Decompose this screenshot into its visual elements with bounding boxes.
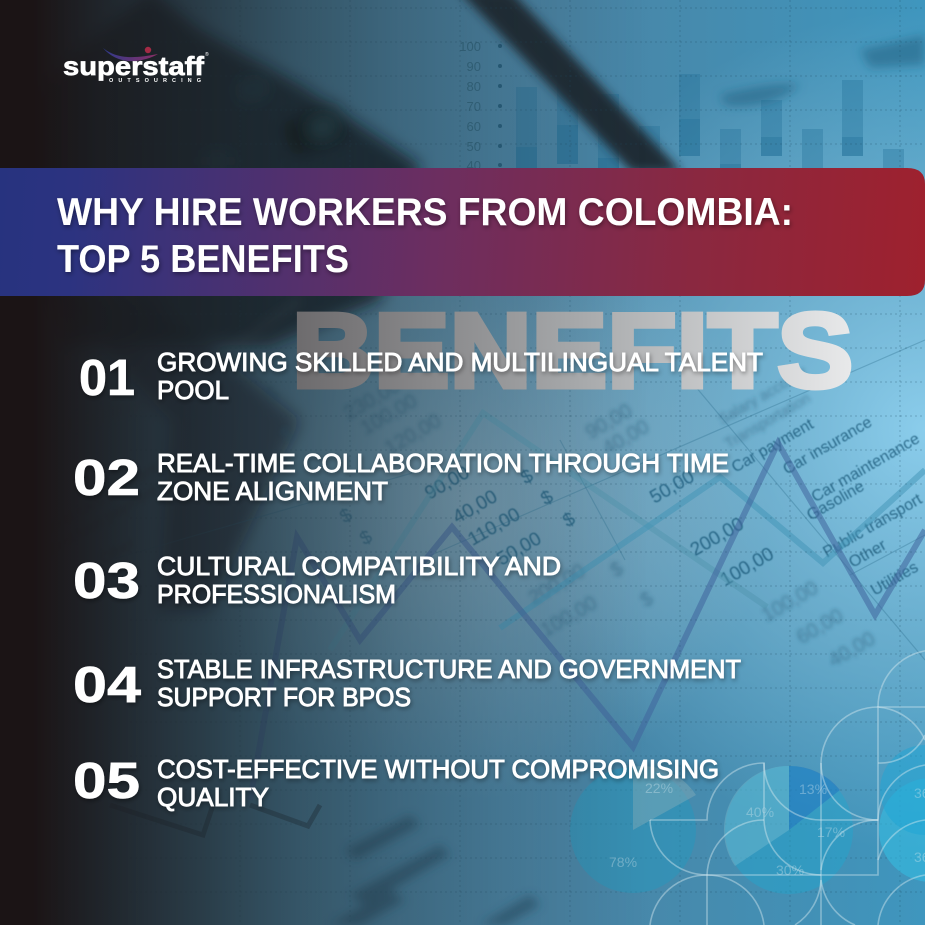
photo background: finance charts and table: 90,00: [421, 462, 473, 504]
benefit 5: [73, 752, 719, 812]
chart axis labels: 100: [459, 39, 481, 54]
benefit 3: PROFESSIONALISM: [157, 579, 396, 609]
benefit 4: SUPPORT FOR BPOS: [157, 682, 411, 712]
benefit 2: [73, 448, 729, 506]
photo background: finance charts and table: Other: [846, 536, 890, 571]
pie charts: 78%: [609, 854, 637, 870]
dark cast shadow, right top: [720, 35, 925, 106]
benefit 2: ZONE ALIGNMENT: [157, 476, 388, 506]
benefit 1: [79, 347, 763, 406]
photo background: finance charts and table: Car payment: [729, 416, 817, 476]
blurred table figures: 100,00: [758, 577, 822, 627]
blurred table figures: $: [637, 587, 657, 612]
chart axis labels: 50: [467, 139, 481, 154]
photo background: finance charts and table: Gasoline: [804, 478, 867, 524]
blurred table figures: [25, 364, 879, 672]
table rules: [110, 340, 925, 660]
photo background: finance charts and table: $: [336, 504, 356, 528]
photo background: finance charts and table: 50,00: [493, 528, 545, 570]
bar chart in the background: [516, 70, 904, 177]
photo background: finance charts and table: 40,00: [449, 486, 501, 528]
photo background: finance charts and table: Car insurance: [780, 414, 875, 478]
pie charts: 30%: [776, 862, 804, 878]
blurred table figures: Salary account: [716, 364, 811, 428]
title: [57, 191, 793, 281]
benefit 3: CULTURAL COMPATIBILITY AND: [157, 551, 561, 581]
blurred table figures: 100,00: [357, 390, 421, 440]
blurred table figures: 60,00: [793, 605, 847, 649]
blurred table figures: 90,00: [582, 400, 636, 444]
photo background: finance charts and table: Utilities: [868, 559, 921, 599]
blurred table figures: 230,00: [340, 375, 404, 425]
calculator: [0, 0, 420, 610]
photo background: finance charts and table: $: [356, 526, 376, 550]
title: TOP 5 BENEFITS: [57, 238, 349, 281]
photo background: finance charts and table: 100,00: [717, 544, 778, 591]
photo background: finance charts and table: 50,00: [646, 466, 698, 508]
blurred table figures: 120,00: [381, 410, 445, 460]
benefit 5: 05: [73, 752, 140, 809]
blurred table figures: Student loan payment: [25, 482, 161, 570]
chart axis labels: 70: [467, 99, 481, 114]
blurred table figures: $: [607, 557, 627, 582]
pie charts: [570, 745, 925, 894]
benefit 1: POOL: [157, 375, 229, 405]
pie charts: 17%: [817, 824, 845, 840]
watermark word: BENEFITS: BENEFITS: [292, 292, 853, 410]
chart axis labels: 60: [467, 119, 481, 134]
benefit 3: 03: [73, 552, 140, 609]
pie charts: 22%: [645, 780, 673, 796]
logo wordmark: superstaff: [63, 51, 204, 81]
chart axis labels: [459, 39, 481, 173]
benefit 4: 04: [73, 656, 142, 713]
photo background: finance charts and table: $: [517, 465, 537, 489]
photo background: finance charts and table: 110,00: [464, 504, 524, 551]
benefit 5: QUALITY: [157, 782, 269, 812]
benefit 5: COST-EFFECTIVE WITHOUT COMPROMISING: [157, 754, 719, 784]
photo background: finance charts and table: $: [559, 508, 579, 532]
photo background: finance charts and table: Public transport: [820, 491, 925, 561]
blurred pen: [458, 0, 682, 172]
benefit 4: [73, 654, 741, 713]
blurred table figures: Transportation: [722, 390, 814, 453]
blurred marks, bottom centre: [330, 815, 540, 925]
title: WHY HIRE WORKERS FROM COLOMBIA:: [57, 191, 793, 234]
calculator edge: [45, 300, 300, 430]
blurred table figures: 40,00: [599, 416, 653, 460]
blurred table figures: $: [277, 422, 297, 447]
logo dot: [145, 47, 151, 53]
logo registered mark: ®: [205, 51, 209, 58]
chart axis dots: [498, 44, 502, 167]
decorative outline shapes, bottom right: [650, 650, 925, 925]
chart axis labels: 40: [467, 158, 481, 173]
benefit 3: [73, 551, 561, 609]
benefit 2: REAL-TIME COLLABORATION THROUGH TIME: [157, 448, 729, 478]
benefit 4: STABLE INFRASTRUCTURE AND GOVERNMENT: [157, 654, 741, 684]
photo background: finance charts and table: $: [537, 486, 557, 510]
blurred table figures: 100,00: [537, 592, 601, 642]
chart axis labels: 80: [467, 79, 481, 94]
logo: superstaff outsourcing: [63, 47, 209, 84]
blurred table figures: Credit card payment: [35, 460, 161, 542]
benefit 1: GROWING SKILLED AND MULTILINGUAL TALENT: [157, 347, 763, 377]
blurred table figures: 40,00: [825, 628, 879, 672]
pie charts: 40%: [746, 804, 774, 820]
photo background: finance charts and table: 200,00: [687, 514, 748, 561]
blurred table figures: 200,00: [525, 560, 589, 610]
benefit 1: 01: [79, 349, 135, 406]
title banner: [0, 168, 925, 296]
blurred table figures: Other: [97, 534, 138, 568]
benefit 2: 02: [73, 449, 140, 506]
zigzag chart lines: [110, 413, 925, 835]
photo background: finance charts and table: Car maintenance: [809, 430, 923, 506]
logo tagline: OUTSOURCING: [109, 78, 201, 84]
logo swoosh: [103, 48, 158, 61]
pie charts: 13%: [799, 781, 827, 797]
chart axis labels: 90: [467, 59, 481, 74]
blurred table figures: $: [262, 382, 282, 407]
